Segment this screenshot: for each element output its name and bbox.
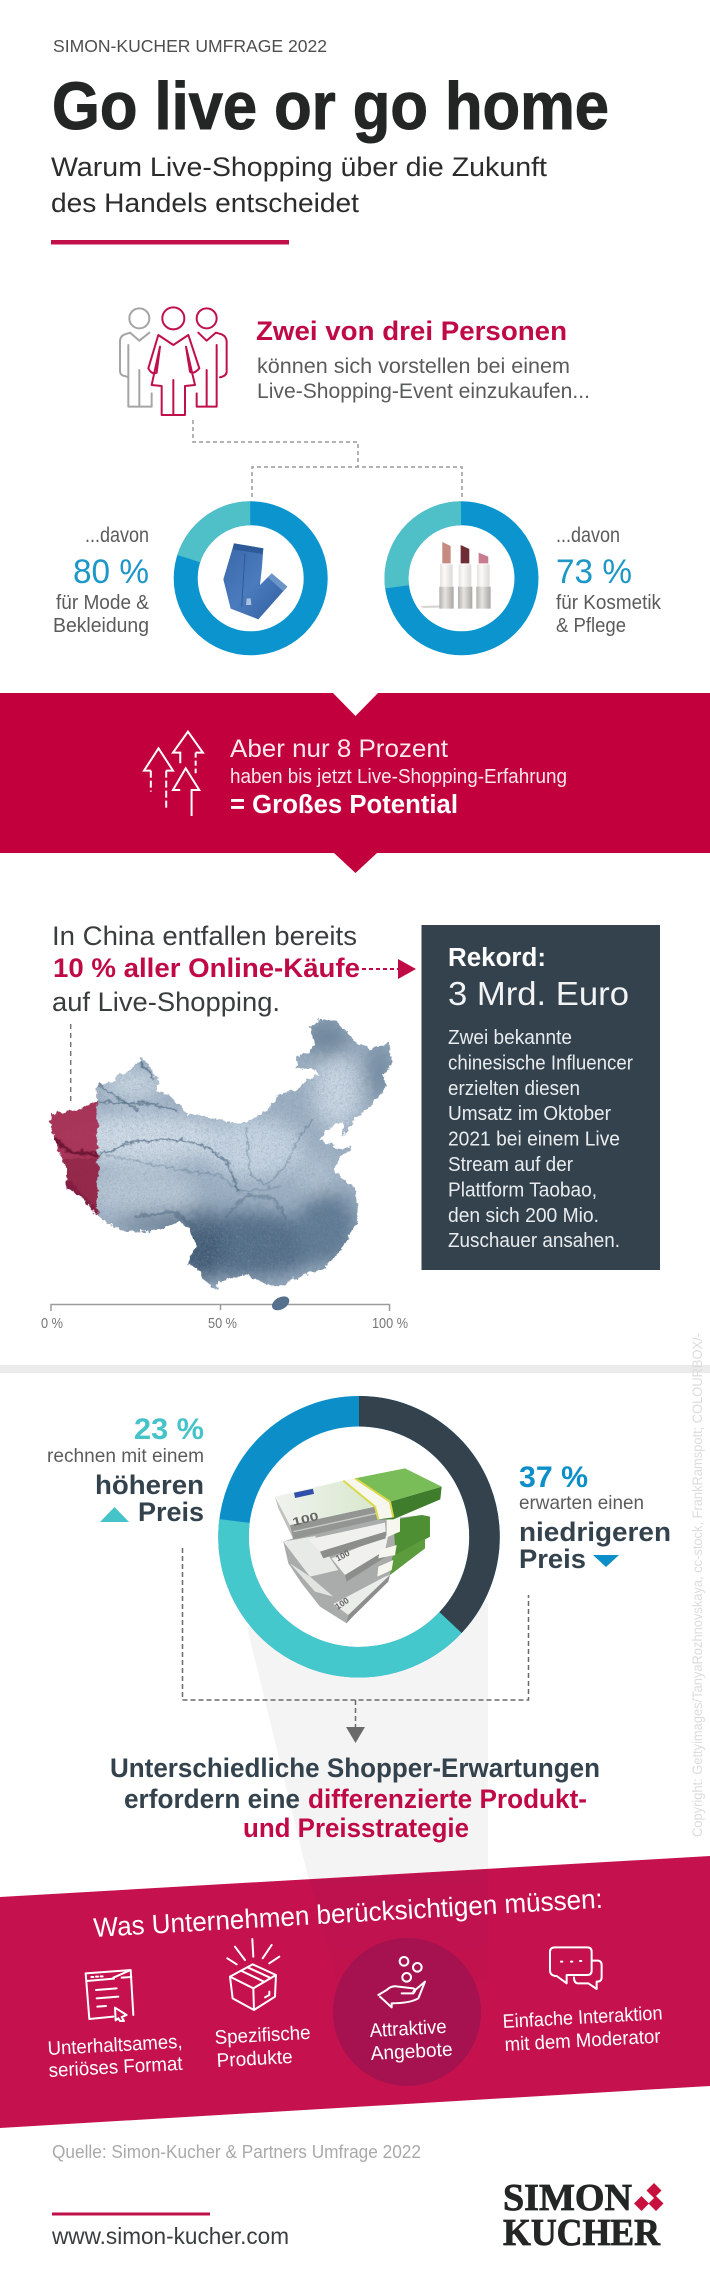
icon: jeans bbox=[223, 543, 287, 619]
left price stat bbox=[47, 1413, 204, 1527]
panel: record box: Rekord: bbox=[448, 944, 546, 972]
left price stat: höheren bbox=[95, 1470, 204, 1500]
band text bbox=[230, 735, 567, 819]
record paragraph: Stream auf der bbox=[448, 1153, 573, 1176]
logo: Simon-Kucher: SIMON bbox=[503, 2177, 632, 2219]
donut: cosmetics 73 percent bbox=[396, 513, 526, 643]
left price stat: rechnen mit einem bbox=[47, 1445, 204, 1467]
image: stack of euro bills bbox=[275, 1468, 442, 1623]
record paragraph: Plattform Taobao, bbox=[448, 1178, 597, 1202]
logo: Simon-Kucher bbox=[503, 2177, 664, 2254]
subtitle: des Handels entscheidet bbox=[51, 188, 360, 218]
China statement: 10 % aller Online-Käufe bbox=[53, 953, 360, 983]
axis below map: 50 % bbox=[208, 1315, 237, 1332]
right price stat: erwarten einen bbox=[519, 1492, 644, 1514]
record paragraph: 2021 bei einem Live bbox=[448, 1128, 620, 1150]
copyright note: Copyright: Gettyimages/TanyaRozhnovskaya, cc-stock, FrankRamspott; COLOURBOX/- bbox=[690, 1333, 705, 1837]
right price stat: Preis bbox=[519, 1544, 586, 1574]
panel: record box: 3 Mrd. Euro bbox=[448, 976, 629, 1013]
headline: two of three bbox=[256, 316, 590, 403]
source note: Quelle: Simon-Kucher & Partners Umfrage 2022 bbox=[52, 2141, 421, 2162]
record paragraph: Zuschauer ansahen. bbox=[448, 1229, 620, 1252]
consideration labels: Angebote bbox=[370, 2039, 453, 2065]
map: China relief with 10 percent highlight bbox=[40, 1015, 400, 1313]
icon: lipsticks bbox=[420, 542, 491, 609]
subtitle: Warum Live-Shopping über die Zukunft bbox=[51, 152, 548, 182]
icon: triangle down bbox=[593, 1555, 619, 1567]
conclusion text: Unterschiedliche Shopper-Erwartungen bbox=[110, 1753, 600, 1783]
left stat: 80 percent fashion: Bekleidung bbox=[53, 614, 149, 637]
right stat: 73 percent cosmetics: für Kosmetik bbox=[556, 591, 662, 614]
left price stat: 23 % bbox=[134, 1413, 204, 1446]
consideration labels: seriöses Format bbox=[48, 2053, 184, 2082]
divider band bbox=[0, 1365, 710, 1373]
donut: fashion 80 percent bbox=[186, 513, 316, 643]
consideration labels: Spezifische bbox=[214, 2022, 311, 2049]
panel: record box bbox=[422, 925, 660, 1270]
highlight circle bbox=[333, 1938, 481, 2086]
logo: Simon-Kucher: KUCHER bbox=[503, 2212, 661, 2254]
China statement bbox=[52, 921, 360, 1017]
left stat: 80 percent fashion: für Mode & bbox=[56, 591, 149, 614]
consideration labels: mit dem Moderator bbox=[504, 2026, 662, 2056]
image: stack of euro bills: 100 bbox=[334, 1548, 352, 1563]
subtitle bbox=[51, 152, 548, 218]
dashed connector bbox=[193, 420, 462, 497]
right stat: 73 percent cosmetics: & Pflege bbox=[556, 614, 626, 637]
icon: parcel box bbox=[227, 1939, 279, 2010]
icon: three people bbox=[120, 307, 227, 415]
title: Go live or go home bbox=[52, 69, 609, 144]
consideration labels: Attraktive bbox=[369, 2016, 447, 2042]
kicker: SIMON-KUCHER UMFRAGE 2022 bbox=[53, 36, 327, 56]
dashed bracket with arrow bbox=[182, 1548, 528, 1743]
icon: hand with coins bbox=[378, 1957, 425, 2007]
title rule bbox=[51, 240, 289, 244]
consideration labels: Einfache Interaktion bbox=[502, 2002, 663, 2033]
right stat: 73 percent cosmetics bbox=[556, 524, 662, 637]
left price stat: Preis bbox=[138, 1497, 204, 1527]
China statement: auf Live-Shopping. bbox=[52, 987, 280, 1017]
band text: Aber nur 8 Prozent bbox=[230, 735, 448, 763]
footer rule bbox=[52, 2212, 210, 2216]
conclusion text: und Preisstrategie bbox=[243, 1813, 469, 1843]
record paragraph bbox=[448, 1026, 633, 1252]
conclusion text bbox=[110, 1753, 600, 1843]
right stat: 73 percent cosmetics: ...davon bbox=[556, 524, 620, 547]
icon: browser window bbox=[86, 1970, 133, 2021]
record paragraph: den sich 200 Mio. bbox=[448, 1204, 599, 1227]
headline: two of three: können sich vorstellen bei einem bbox=[257, 355, 570, 378]
consideration labels: Unterhaltsames, bbox=[47, 2031, 183, 2060]
light beam behind donut bbox=[247, 1603, 488, 1885]
icon: rising arrows bbox=[144, 732, 203, 816]
conclusion text: differenzierte Produkt- bbox=[308, 1784, 587, 1814]
right price stat: 37 % bbox=[519, 1461, 588, 1494]
band text: = Großes Potential bbox=[230, 791, 458, 819]
record paragraph: chinesische Influencer bbox=[448, 1052, 633, 1074]
band heading: Was Unternehmen berücksichtigen müssen: bbox=[93, 1884, 603, 1943]
axis below map bbox=[41, 1304, 408, 1332]
left stat: 80 percent fashion: 80 % bbox=[73, 553, 149, 591]
icon: triangle up bbox=[100, 1507, 129, 1522]
image: stack of euro bills: 100 bbox=[333, 1595, 351, 1612]
right price stat bbox=[519, 1461, 671, 1574]
left stat: 80 percent fashion bbox=[53, 524, 149, 637]
headline: two of three: Live-Shopping-Event einzukaufen... bbox=[257, 380, 590, 403]
right stat: 73 percent cosmetics: 73 % bbox=[556, 553, 632, 591]
dashed marker above map bbox=[70, 1024, 72, 1103]
left stat: 80 percent fashion: ...davon bbox=[85, 524, 149, 547]
panel: what companies must consider bbox=[0, 1856, 710, 2128]
China statement: In China entfallen bereits bbox=[52, 921, 357, 951]
consideration labels: Produkte bbox=[216, 2046, 293, 2072]
right price stat: niedrigeren bbox=[519, 1517, 671, 1547]
record paragraph: Zwei bekannte bbox=[448, 1026, 572, 1049]
arrow to record box bbox=[362, 959, 416, 979]
donut: price expectations bbox=[234, 1411, 484, 1662]
image: stack of euro bills: 100 bbox=[291, 1511, 320, 1529]
icon: chat bubbles bbox=[550, 1947, 602, 1989]
axis below map: 0 % bbox=[41, 1315, 63, 1332]
record paragraph: erzielten diesen bbox=[448, 1077, 580, 1100]
headline: two of three: Zwei von drei Personen bbox=[256, 316, 567, 346]
conclusion text: erfordern eine bbox=[124, 1784, 300, 1814]
record paragraph: Umsatz im Oktober bbox=[448, 1102, 611, 1125]
band text: haben bis jetzt Live-Shopping-Erfahrung bbox=[230, 766, 567, 788]
consideration labels bbox=[47, 2002, 663, 2082]
website: www.simon-kucher.com bbox=[51, 2223, 289, 2249]
panel: red potential band bbox=[0, 693, 710, 873]
axis below map: 100 % bbox=[372, 1315, 408, 1332]
